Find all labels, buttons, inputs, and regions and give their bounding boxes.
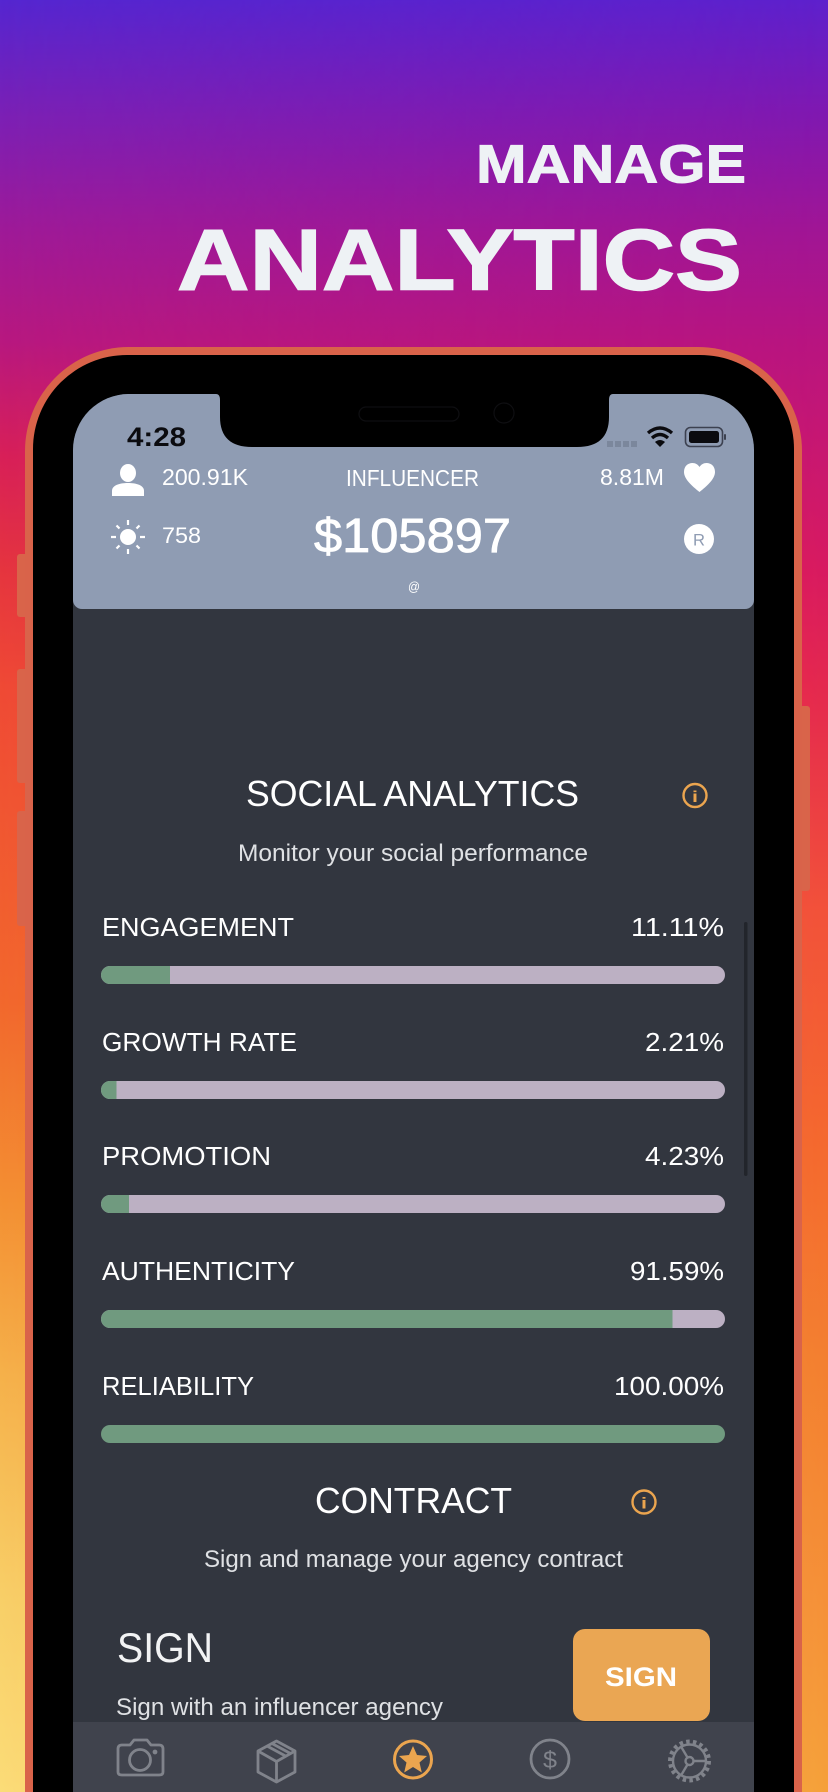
heading: SOCIAL ANALYTICS bbox=[246, 773, 579, 814]
title: ANALYTICS bbox=[177, 212, 742, 308]
metric: authenticity: AUTHENTICITY bbox=[102, 1256, 295, 1286]
icon: sun bbox=[111, 520, 145, 554]
notch bbox=[216, 394, 613, 447]
icon: R badge: R bbox=[693, 530, 705, 550]
metric: growth rate: 2.21% bbox=[645, 1027, 724, 1057]
sign button bbox=[573, 1629, 710, 1721]
panel: contract bbox=[116, 1480, 710, 1721]
metric: reliability bbox=[101, 1371, 725, 1443]
icon: star tab active bbox=[394, 1741, 432, 1778]
metric: promotion: PROMOTION bbox=[102, 1141, 271, 1171]
tab bar bbox=[73, 1722, 754, 1792]
phone frame bbox=[17, 347, 810, 1792]
likes value: 8.81M bbox=[600, 464, 664, 490]
panel: social analytics bbox=[101, 773, 748, 1443]
metric: engagement bbox=[101, 912, 725, 984]
metric: promotion: 4.23% bbox=[645, 1141, 724, 1171]
status icons bbox=[607, 428, 726, 447]
role label: INFLUENCER bbox=[346, 465, 479, 491]
metric: growth rate bbox=[101, 1027, 725, 1099]
icon: heart bbox=[684, 463, 715, 492]
icon: info bbox=[632, 1490, 656, 1514]
sign button: SIGN bbox=[605, 1662, 677, 1692]
icon: box tab bbox=[258, 1741, 295, 1782]
metric: engagement: ENGAGEMENT bbox=[102, 912, 294, 942]
icon: dollar tab: $ bbox=[543, 1747, 557, 1774]
subheading: Sign and manage your agency contract bbox=[204, 1546, 623, 1573]
title: MANAGE bbox=[476, 134, 746, 194]
icon: info bbox=[684, 784, 706, 807]
metric: engagement: 11.11% bbox=[631, 912, 724, 942]
icon: camera tab bbox=[118, 1740, 163, 1775]
icon: info: i bbox=[692, 789, 698, 806]
header panel bbox=[73, 394, 754, 609]
icon: dollar tab bbox=[531, 1740, 569, 1778]
sign label: SIGN bbox=[117, 1624, 213, 1671]
icon: R badge bbox=[684, 524, 714, 554]
handle: @ bbox=[408, 579, 420, 594]
status time: 4:28 bbox=[127, 422, 186, 452]
screen background bbox=[73, 394, 754, 1792]
sign description: Sign with an influencer agency bbox=[116, 1694, 443, 1721]
metric: reliability: 100.00% bbox=[614, 1371, 724, 1401]
metric: authenticity bbox=[101, 1256, 725, 1328]
icon: gear tab bbox=[670, 1742, 709, 1780]
balance: $105897 bbox=[314, 510, 511, 563]
scrollbar bbox=[744, 922, 748, 1176]
icon: followers person bbox=[112, 464, 144, 496]
metric: growth rate: GROWTH RATE bbox=[102, 1027, 297, 1057]
title bbox=[177, 134, 746, 308]
heading: CONTRACT bbox=[315, 1480, 512, 1521]
icon: info: i bbox=[641, 1496, 647, 1512]
subheading: Monitor your social performance bbox=[238, 840, 588, 867]
metric: promotion bbox=[101, 1141, 725, 1213]
reach value: 758 bbox=[162, 523, 201, 548]
metric: authenticity: 91.59% bbox=[630, 1256, 724, 1286]
metric: reliability: RELIABILITY bbox=[102, 1371, 254, 1401]
followers value: 200.91K bbox=[162, 464, 249, 490]
